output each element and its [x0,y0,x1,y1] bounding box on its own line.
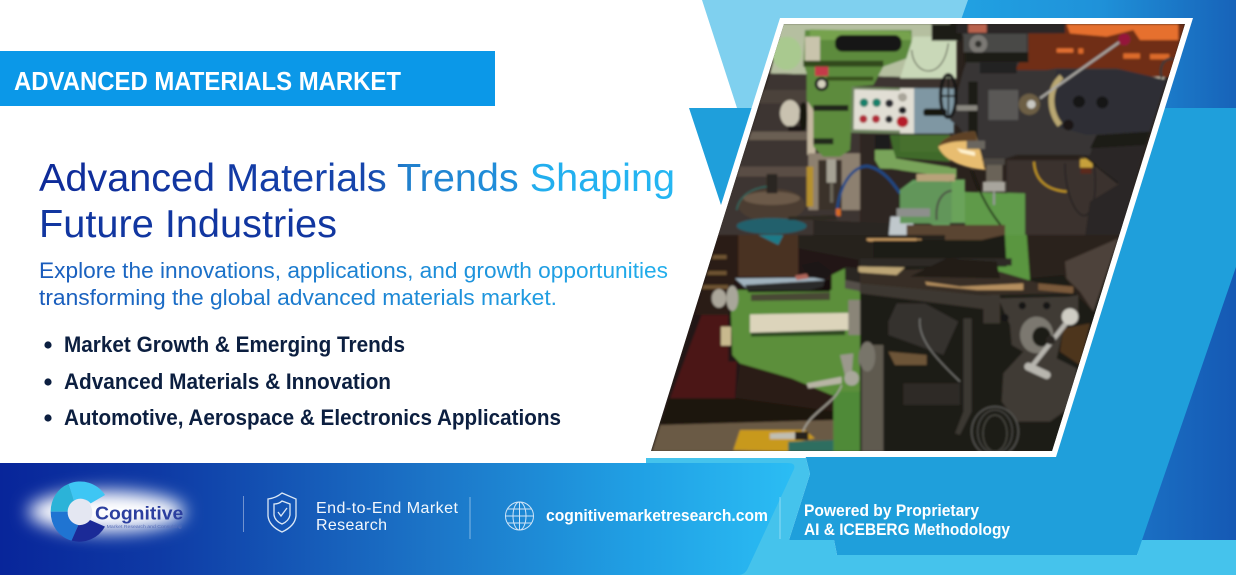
bullet list: Market Growth & Emerging Trends [64,332,405,357]
photo area: right carriage and handle [859,235,1120,457]
service text: End-to-End Market [316,500,459,517]
photo frame [646,18,1193,457]
photo area: green mill and control panel [713,23,950,240]
divider [469,497,471,539]
main heading: Future Industries [39,203,337,246]
divider [779,497,781,539]
service text: Research [316,517,387,534]
logo: Cognitive: Cognitive [95,502,183,523]
icon: globe [506,502,534,530]
subtitle [39,258,668,310]
subtitle: Explore the innovations, applications, and growth opportunities [39,258,668,283]
photo area: left lathe bed and crank [652,235,945,452]
bullet list: Advanced Materials & Innovation [64,369,391,394]
main heading [39,157,675,246]
methodology text: AI & ICEBERG Methodology [804,521,1011,539]
icon: shield [268,493,296,532]
photo: milling machines [640,20,1200,457]
website: cognitivemarketresearch.com [546,507,768,525]
background shapes [646,0,1236,575]
top banner [0,51,495,106]
subtitle: transforming the global advanced materials market. [39,285,557,310]
top banner: ADVANCED MATERIALS MARKET [14,68,401,96]
main heading: Advanced Materials Trends Shaping [39,157,675,200]
logo: Cognitive: Market Research and Consulting [107,524,182,530]
footer band [0,463,794,575]
methodology text: Powered by Proprietary [804,502,980,520]
bullet list [44,332,561,430]
service text [316,500,459,534]
bullet list: Automotive, Aerospace & Electronics Applications [64,405,561,430]
photo area: machine head and arm [897,24,1185,240]
logo: Cognitive [28,481,185,542]
methodology text [804,502,1011,539]
divider [242,496,244,532]
